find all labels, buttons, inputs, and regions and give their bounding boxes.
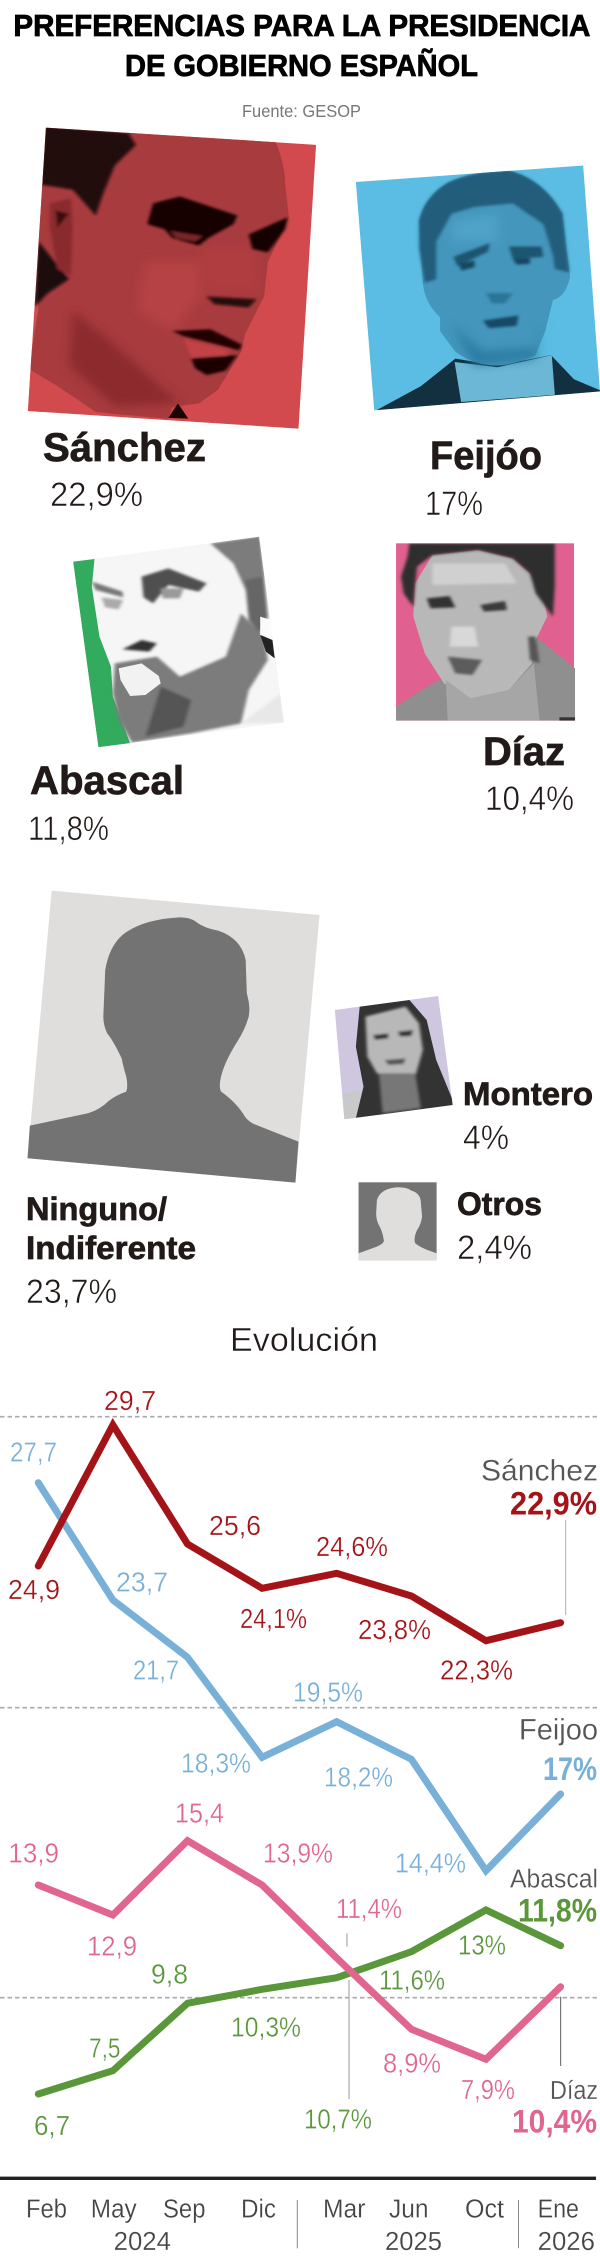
time axis: Sep bbox=[163, 2196, 206, 2224]
values: Abascal: 13% bbox=[458, 1929, 506, 1960]
time axis: Dic bbox=[241, 2196, 276, 2224]
values: Feijóo: 19,5% bbox=[293, 1677, 363, 1708]
line chart: evolution bbox=[0, 1385, 600, 2141]
time axis: Mar bbox=[323, 2196, 366, 2224]
label: Otros bbox=[457, 1186, 542, 1267]
label: Abascal: Abascal bbox=[30, 759, 184, 803]
label: Ninguno/Indiferente: Indiferente bbox=[26, 1230, 196, 1266]
panel: Díaz portrait bbox=[396, 543, 575, 721]
end label: Sánchez: Sánchez bbox=[481, 1455, 598, 1488]
end label: Abascal bbox=[510, 1866, 598, 1929]
line: Abascal bbox=[38, 1910, 561, 2094]
values: Díaz bbox=[8, 1798, 515, 2105]
values: Díaz: 13,9% bbox=[263, 1838, 333, 1869]
values: Feijóo bbox=[10, 1437, 466, 1879]
label: Díaz: Díaz bbox=[483, 730, 565, 774]
values: Feijóo: 14,4% bbox=[395, 1848, 466, 1879]
panel: Feijóo portrait bbox=[356, 166, 600, 412]
values: Abascal: 11,6% bbox=[379, 1964, 445, 1995]
values: Sánchez: 29,7 bbox=[104, 1385, 156, 1416]
title: DE GOBIERNO ESPAÑOL bbox=[125, 48, 478, 83]
time axis: 2024 bbox=[114, 2228, 171, 2256]
label: Sánchez: 22,9% bbox=[50, 476, 143, 514]
label: Abascal bbox=[28, 759, 184, 848]
time axis: May bbox=[91, 2196, 137, 2224]
label: Sánchez bbox=[43, 426, 206, 514]
values: Díaz: 8,9% bbox=[383, 2048, 441, 2079]
end label: Feijoo: Feijoo bbox=[519, 1713, 598, 1746]
values: Abascal: 7,5 bbox=[89, 2032, 120, 2063]
leader lines bbox=[347, 1520, 566, 2099]
values: Feijóo: 18,3% bbox=[181, 1747, 251, 1778]
values: Abascal: 10,7% bbox=[304, 2103, 372, 2134]
values: Díaz: 13,9 bbox=[8, 1838, 59, 1869]
label: Feijóo: Feijóo bbox=[430, 434, 542, 478]
values: Díaz: 11,4% bbox=[336, 1893, 402, 1924]
label: Sánchez: Sánchez bbox=[43, 426, 206, 470]
panel: Otros silhouette bbox=[359, 1182, 437, 1261]
panel: Sánchez portrait bbox=[27, 126, 316, 429]
values: Feijóo: 27,7 bbox=[10, 1437, 57, 1468]
time axis: Jun bbox=[389, 2196, 429, 2224]
label: Ninguno/Indiferente: Ninguno/ bbox=[26, 1191, 167, 1227]
time axis: 2026 bbox=[538, 2228, 595, 2256]
panel: Montero portrait bbox=[335, 996, 455, 1122]
values: Sánchez bbox=[8, 1385, 513, 1685]
values: Sánchez: 23,8% bbox=[358, 1614, 431, 1645]
label: Ninguno/Indiferente: 23,7% bbox=[26, 1273, 117, 1311]
line: Díaz bbox=[38, 1841, 561, 2059]
values: Abascal: 6,7 bbox=[34, 2110, 70, 2141]
label: Díaz: 10,4% bbox=[485, 780, 574, 818]
values: Abascal: 10,3% bbox=[231, 2012, 301, 2043]
values: Díaz: 12,9 bbox=[87, 1931, 137, 1962]
time axis bbox=[0, 2177, 596, 2256]
values: Sánchez: 25,6 bbox=[209, 1510, 261, 1541]
values: Abascal bbox=[34, 1929, 506, 2141]
label: Otros: Otros bbox=[457, 1186, 542, 1222]
end label: Abascal: Abascal bbox=[510, 1866, 598, 1894]
label: Montero bbox=[463, 1076, 593, 1157]
end label: Sánchez: 22,9% bbox=[510, 1485, 597, 1521]
panel: Abascal portrait bbox=[73, 536, 285, 747]
values: Abascal: 9,8 bbox=[151, 1958, 188, 1989]
values: Sánchez: 24,6% bbox=[316, 1531, 388, 1562]
label: Abascal: 11,8% bbox=[28, 810, 109, 848]
end label: Díaz bbox=[512, 2077, 598, 2140]
title bbox=[13, 8, 590, 83]
source note: Fuente: GESOP bbox=[242, 101, 361, 121]
time axis: Ene bbox=[538, 2196, 579, 2224]
values: Díaz: 7,9% bbox=[461, 2074, 515, 2105]
values: Sánchez: 22,3% bbox=[440, 1654, 513, 1685]
values: Feijóo: 23,7 bbox=[116, 1567, 168, 1598]
end label: Sánchez bbox=[481, 1455, 598, 1521]
values: Sánchez: 24,9 bbox=[8, 1574, 60, 1605]
label: Montero: Montero bbox=[463, 1076, 593, 1112]
panel: Ninguno silhouette bbox=[28, 891, 320, 1183]
label: Feijóo: 17% bbox=[425, 485, 483, 523]
values: Feijóo: 21,7 bbox=[133, 1654, 179, 1685]
time axis: Oct bbox=[465, 2196, 504, 2224]
time axis: Feb bbox=[26, 2196, 67, 2224]
label: Díaz bbox=[483, 730, 574, 818]
end label: Feijoo bbox=[519, 1713, 598, 1787]
heading: Evolución: Evolución bbox=[230, 1321, 378, 1358]
line: Feijóo bbox=[38, 1483, 561, 1871]
values: Feijóo: 18,2% bbox=[324, 1762, 393, 1793]
values: Sánchez: 24,1% bbox=[240, 1603, 307, 1634]
values: Díaz: 15,4 bbox=[175, 1798, 224, 1829]
label: Otros: 2,4% bbox=[457, 1229, 532, 1267]
label: Montero: 4% bbox=[463, 1119, 509, 1157]
label: Ninguno/Indiferente bbox=[26, 1191, 196, 1311]
label: Feijóo bbox=[425, 434, 542, 523]
time axis: 2025 bbox=[385, 2228, 442, 2256]
line: Sánchez bbox=[38, 1425, 561, 1641]
